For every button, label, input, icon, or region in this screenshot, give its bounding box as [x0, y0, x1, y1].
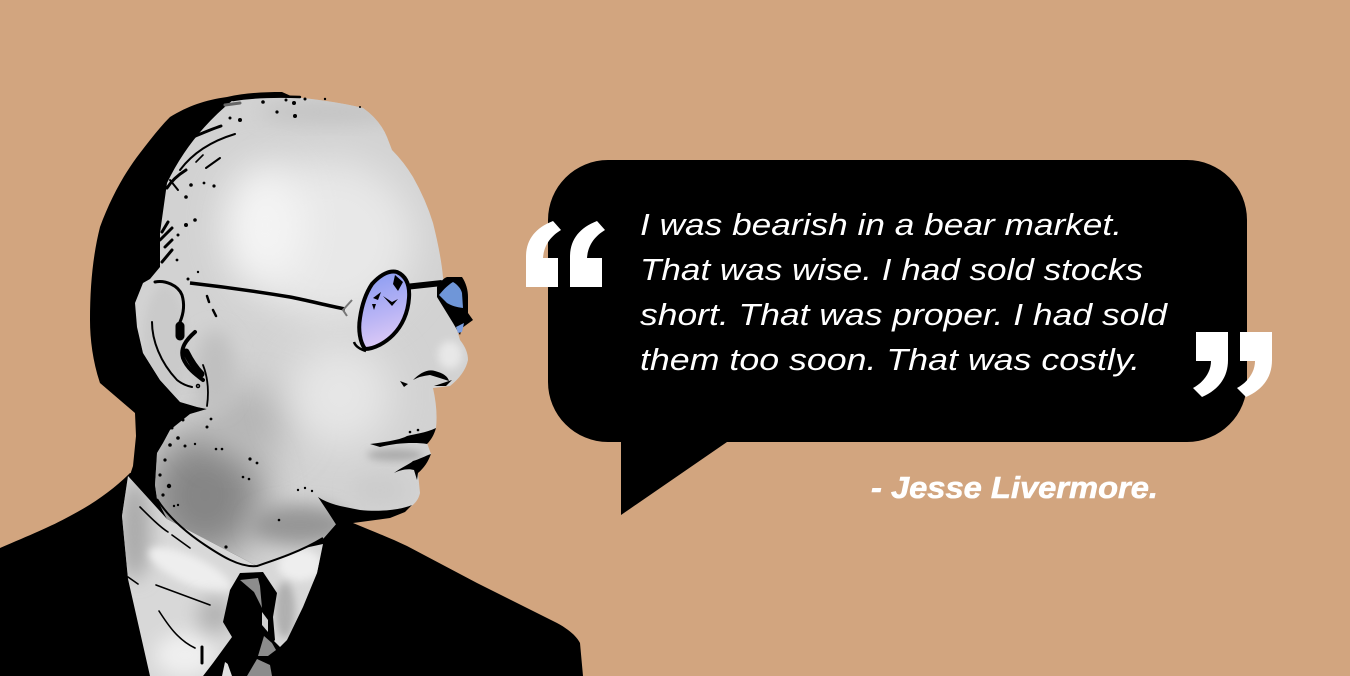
scalp dots — [176, 98, 361, 280]
stubble dots along the jaw — [158, 418, 313, 549]
nostril — [400, 370, 452, 387]
hair strands and speckles — [131, 97, 300, 278]
shirt fold lines — [128, 507, 210, 663]
far lens — [437, 277, 473, 335]
temple arm — [190, 283, 345, 309]
mouth — [370, 428, 436, 480]
shirt and collar — [122, 476, 323, 676]
near lens — [359, 272, 409, 349]
shirt lower piece — [222, 662, 245, 676]
attribution: - Jesse Livermore. — [871, 470, 1158, 505]
quote text — [640, 207, 1169, 377]
quote text: them too soon. That was costly. — [640, 342, 1140, 377]
quote text: I was bearish in a bear market. — [640, 207, 1122, 242]
ear details — [152, 282, 216, 406]
jaw shadow — [318, 497, 412, 526]
lens reflections — [372, 292, 398, 310]
portrait: man in profile with tinted glasses — [0, 85, 583, 676]
opening quotation mark — [526, 221, 605, 287]
necktie — [223, 572, 277, 676]
bridge — [405, 283, 442, 287]
quote text: That was wise. I had sold stocks — [640, 252, 1143, 287]
closing quotation mark — [1193, 332, 1272, 397]
quote text: short. That was proper. I had sold — [640, 297, 1169, 332]
suit silhouette — [0, 473, 583, 676]
hair and head silhouette — [90, 92, 300, 500]
speech bubble — [548, 160, 1247, 515]
face and head skin tones — [135, 98, 468, 566]
collar and neck line — [157, 499, 323, 566]
eyeglasses — [190, 272, 473, 351]
